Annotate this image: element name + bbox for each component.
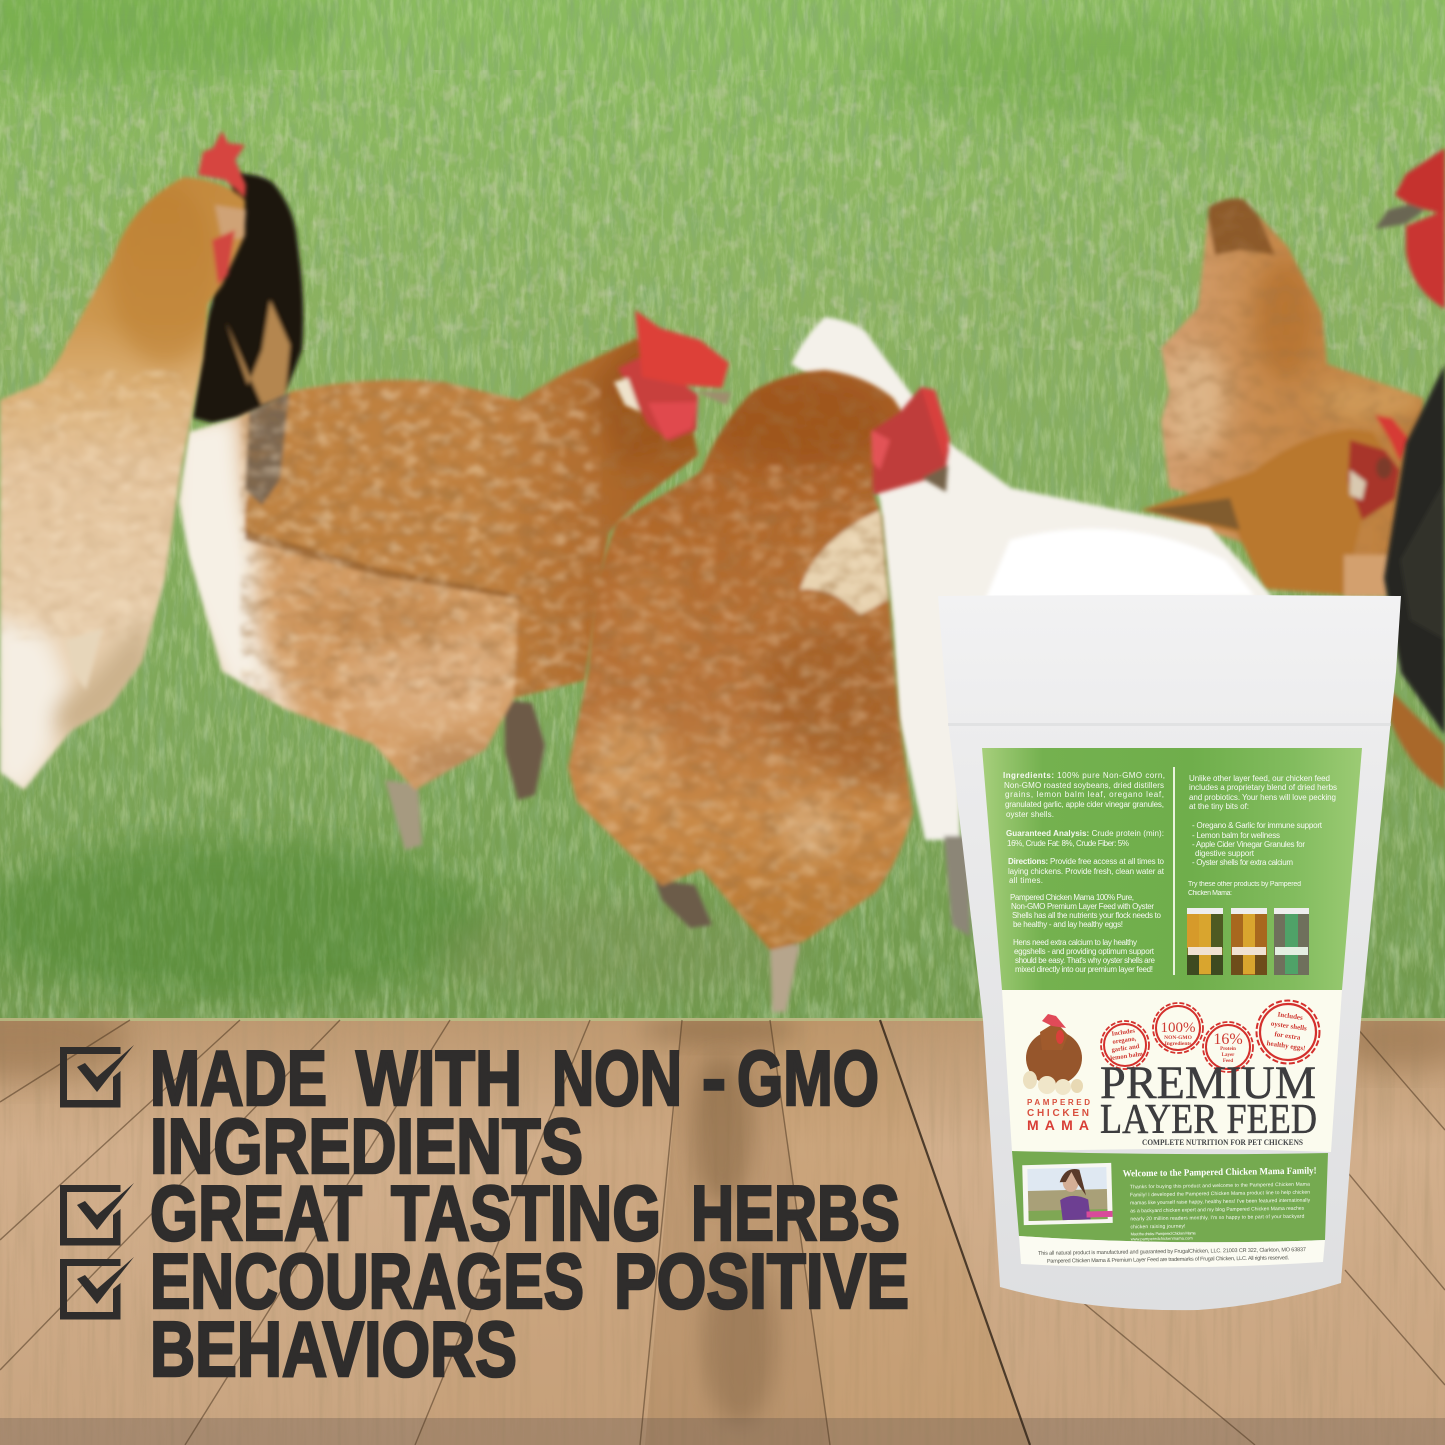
welcome text: Family! I developed the Pampered Chicken Mama product line to help chicken — [1130, 1190, 1310, 1198]
brown hen head — [614, 310, 731, 441]
cream label panel — [1002, 990, 1342, 1152]
badges — [1101, 1000, 1320, 1072]
bullet 2: herbs — [60, 1169, 900, 1257]
right column text: at the tiny bits of: — [1189, 802, 1249, 811]
badge: herbs — [1101, 1021, 1149, 1069]
left column text: Hens need extra calcium to lay healthy — [1013, 938, 1137, 947]
left cream hen — [0, 131, 246, 800]
left column text: mixed directly into our premium layer feed! — [1015, 965, 1153, 974]
badge: 16% protein: Protein — [1220, 1047, 1236, 1052]
product bag — [938, 595, 1401, 1310]
right column text: - Oregano & Garlic for immune support — [1192, 821, 1323, 830]
lower white strip with legal text — [1019, 1236, 1325, 1268]
lower orange hen — [1141, 429, 1395, 595]
badge: oyster shells: healthy eggs! — [1266, 1039, 1306, 1053]
author photo — [1022, 1163, 1113, 1225]
badge: oyster shells: oyster shells — [1270, 1020, 1308, 1033]
text: great tasting herbs: HERBS — [691, 1169, 900, 1257]
left column text: Ingredients: 100% pure Non-GMO corn, — [1003, 771, 1165, 780]
text: encourages positive behaviors: ENCOURAGES — [150, 1237, 584, 1325]
left column text: Shells has all the nutrients your flock needs to — [1012, 911, 1162, 920]
text: made with non-GMO ingredients: WITH — [356, 1034, 522, 1122]
right column text — [1188, 774, 1337, 897]
badge: herbs: garlic and — [1111, 1043, 1140, 1054]
right column text: and probiotics. Your hens will love pecking — [1189, 793, 1336, 802]
product title: LAYER FEED — [1100, 1097, 1317, 1143]
lower white strip with legal text: This all natural product is manufactured and guaranteed by FrugalChicken, LLC. 21003 CR 322, Clarkton, MO 63837 — [1038, 1247, 1306, 1257]
badge: 16% protein: Layer — [1222, 1053, 1235, 1058]
badge: 100% non-GMO: Ingredients — [1165, 1041, 1191, 1047]
other products thumbnails — [1187, 908, 1309, 975]
left column text: Pampered Chicken Mama 100% Pure, — [1010, 893, 1134, 902]
welcome text: as a backyard chicken expert and my blog Pampered Chicken Mama reaches — [1130, 1206, 1305, 1214]
left column text: laying chickens. Provide fresh, clean water at — [1008, 867, 1165, 876]
front hen head — [871, 387, 950, 495]
bullet 1: non-GMO — [60, 1034, 879, 1190]
welcome text: Thanks for buying this product and welcome to the Pampered Chicken Mama — [1130, 1182, 1310, 1190]
welcome text: Welcome to the Pampered Chicken Mama Family! — [1123, 1166, 1317, 1180]
right column text: - Oyster shells for extra calcium — [1192, 858, 1293, 867]
black tail of brown hen — [193, 173, 303, 423]
welcome text: chicken raising journey! — [1130, 1224, 1186, 1230]
text: great tasting herbs — [150, 1169, 900, 1257]
brand logo: PAMPERED — [1027, 1098, 1090, 1107]
left column text: 16%, Crude Fat: 8%, Crude Fiber: 5% — [1007, 839, 1129, 848]
right column text: Unlike other layer feed, our chicken feed — [1189, 774, 1330, 783]
brand logo: MAMA — [1027, 1117, 1089, 1133]
left column text: granulated garlic, apple cider vinegar granules, — [1005, 800, 1164, 809]
text: made with non-GMO ingredients: MADE — [150, 1034, 327, 1122]
welcome text — [1123, 1166, 1318, 1242]
brand logo: CHICKEN — [1027, 1108, 1089, 1119]
badge: 100% non-GMO: 100% — [1160, 1020, 1196, 1036]
text: made with non-GMO ingredients — [150, 1034, 879, 1190]
badge: oyster shells — [1256, 1000, 1320, 1064]
green ingredients panel — [982, 748, 1362, 990]
welcome text: www.pamperedchickenmama.com — [1131, 1235, 1193, 1241]
white hen — [791, 317, 1271, 937]
badge: herbs: Includes — [1111, 1027, 1136, 1038]
badge: herbs: oregano, — [1112, 1035, 1137, 1046]
right column text: digestive support — [1195, 849, 1255, 858]
chickens photo — [0, 131, 1445, 1012]
badge: 100% non-GMO — [1153, 1003, 1203, 1053]
badge: 16% protein — [1203, 1022, 1253, 1072]
left column text: Non-GMO Premium Layer Feed with Oyster — [1011, 902, 1154, 911]
right column text: includes a proprietary blend of dried herbs — [1189, 783, 1337, 792]
text: great tasting herbs: GREAT — [150, 1169, 362, 1257]
icon: hen on eggs — [1023, 1014, 1083, 1095]
bag body — [938, 595, 1401, 1310]
icon: checkbox — [60, 1045, 134, 1108]
left column text: be healthy - and lay healthy eggs! — [1013, 920, 1123, 929]
icon: checkbox — [60, 1257, 134, 1320]
right column text: Try these other products by Pampered — [1188, 881, 1301, 888]
icon: checkbox — [60, 1183, 134, 1246]
brown hen — [165, 335, 700, 850]
grass background — [0, 0, 1445, 1020]
left column text: Non-GMO roasted soybeans, dried distillers — [1004, 781, 1164, 790]
dark hen — [1384, 364, 1445, 790]
left column text: eggshells - and providing optimum support — [1014, 947, 1155, 956]
wooden floor — [0, 1000, 1445, 1445]
product title: COMPLETE NUTRITION FOR PET CHICKENS — [1142, 1138, 1303, 1147]
right column text: - Lemon balm for wellness — [1192, 831, 1280, 840]
welcome text: Meet the chicks: Pampered Chicken Mama — [1131, 1230, 1196, 1236]
bullet 3: behaviors — [60, 1237, 909, 1393]
left column text: grains, lemon balm leaf, oregano leaf, — [1005, 790, 1164, 799]
text: encourages positive behaviors: BEHAVIORS — [150, 1305, 517, 1393]
text: encourages positive behaviors — [150, 1237, 909, 1393]
text: great tasting herbs: TASTING — [391, 1169, 661, 1257]
text: made with non-GMO ingredients: - — [702, 1034, 726, 1122]
badge: oyster shells: for extra — [1274, 1030, 1301, 1042]
text: made with non-GMO ingredients: INGREDIENTS — [150, 1102, 583, 1190]
front brown hen — [560, 365, 921, 1012]
brand logo — [1023, 1014, 1090, 1133]
rooster head — [1375, 148, 1445, 309]
welcome green panel — [1012, 1151, 1328, 1242]
badge: oyster shells: Includes — [1277, 1010, 1304, 1022]
left column text: Directions: Provide free access at all times to — [1008, 857, 1165, 866]
product title: PREMIUM — [1100, 1057, 1316, 1109]
left column text: should be easy. That's why oyster shells are — [1015, 956, 1156, 965]
bullet list — [60, 1034, 909, 1393]
left column text: all times. — [1009, 876, 1043, 885]
welcome text: nearly 20 million readers monthly. I'm so happy to be part of your backyard — [1130, 1214, 1305, 1222]
lower white strip with legal text: Pampered Chicken Mama & Premium Layer Feed are trademarks of Frugal Chicken, LLC. All rights reserved. — [1047, 1255, 1289, 1265]
right rear hens — [1140, 195, 1440, 597]
badge: herbs: lemon balm — [1110, 1051, 1144, 1062]
text: made with non-GMO ingredients: NON — [552, 1034, 682, 1122]
text: encourages positive behaviors: POSITIVE — [614, 1237, 909, 1325]
text: made with non-GMO ingredients: GMO — [737, 1034, 879, 1122]
badge: 100% non-GMO: NON-GMO — [1164, 1035, 1193, 1041]
left column text: oyster shells. — [1006, 810, 1054, 819]
right column text: Chicken Mama: — [1188, 890, 1232, 897]
left column text: Guaranteed Analysis: Crude protein (min): — [1006, 829, 1164, 838]
product title — [1100, 1057, 1317, 1147]
badge: 16% protein: Feed — [1223, 1059, 1233, 1064]
right column text: - Apple Cider Vinegar Granules for — [1192, 840, 1305, 849]
left column text — [1003, 771, 1165, 974]
welcome text: mamas like yourself raise happy, healthy hens! I've been featured internationally — [1130, 1198, 1311, 1206]
badge: 16% protein: 16% — [1213, 1031, 1243, 1048]
